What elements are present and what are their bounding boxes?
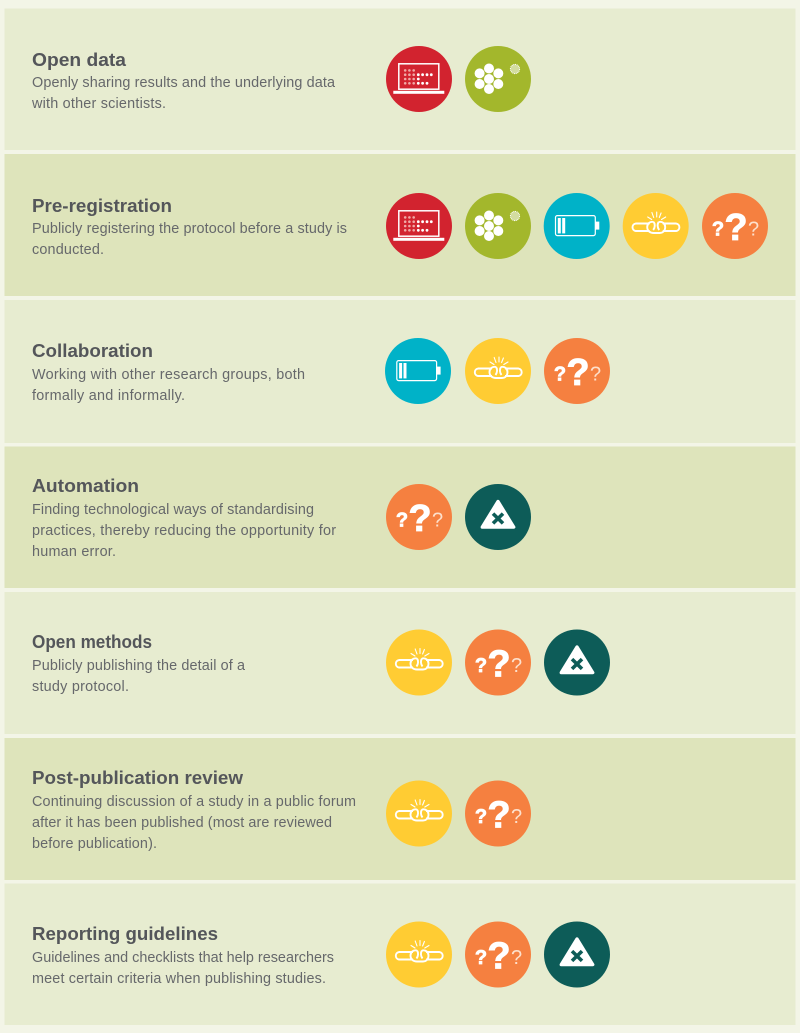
panel: collaboration: [4, 300, 796, 443]
description: collaboration: Working with other research groups, both: [32, 367, 305, 383]
icon: question marks: ?: [712, 219, 724, 241]
description: pre-registration: [32, 221, 347, 258]
icon: question marks: ?: [475, 655, 487, 677]
icon: broken chain: [386, 922, 452, 988]
description: pre-registration: conducted.: [32, 242, 104, 258]
heading: automation: Automation: [32, 475, 139, 496]
icon: question marks: ?: [475, 947, 487, 969]
heading: pre-registration: Pre-registration: [32, 195, 172, 216]
icon: question marks: ?: [487, 936, 511, 978]
heading: collaboration: Collaboration: [32, 340, 153, 361]
icon: question marks: ?: [432, 510, 443, 532]
panel: open data: [4, 8, 796, 150]
description: reporting guidelines: meet certain criteria when publishing studies.: [32, 971, 326, 987]
description: open methods: study protocol.: [32, 679, 129, 695]
icon: question marks: [544, 338, 610, 404]
icon: question marks: ?: [487, 794, 511, 836]
icon: question marks: [465, 780, 531, 846]
heading: open methods: Open methods: [32, 631, 152, 652]
description: open data: with other scientists.: [31, 96, 166, 112]
icon: warning triangle: [465, 484, 531, 550]
panel: open methods: [4, 592, 796, 734]
icon: question marks: [465, 922, 531, 988]
icon: question marks: [465, 630, 531, 696]
description: automation: Finding technological ways of standardising: [32, 502, 314, 518]
icon: question marks: ?: [511, 947, 522, 969]
description: automation: practices, thereby reducing the opportunity for: [32, 523, 336, 539]
icon: laptop data: [386, 46, 452, 112]
panel: automation: [4, 446, 796, 588]
description: post-publication review: [32, 794, 356, 852]
description: automation: [32, 502, 336, 560]
panel: reporting guidelines: [4, 884, 796, 1025]
icon: question marks: ?: [511, 655, 522, 677]
icon: flower cells: [465, 193, 531, 259]
icon: low battery: [544, 193, 610, 259]
description: open methods: Publicly publishing the detail of a: [32, 658, 245, 674]
panel: pre-registration: [4, 154, 796, 296]
icon: question marks: ?: [724, 207, 748, 249]
heading: post-publication review: Post-publication review: [32, 767, 244, 788]
icon: flower cells: [465, 46, 531, 112]
description: reporting guidelines: [32, 950, 334, 987]
description: post-publication review: Continuing discussion of a study in a public forum: [32, 794, 356, 810]
icon: question marks: ?: [554, 364, 566, 386]
icon: question marks: ?: [408, 498, 432, 540]
icon: broken chain: [386, 630, 452, 696]
icon: warning triangle: [544, 922, 610, 988]
icon: question marks: [702, 193, 768, 259]
icon: question marks: ?: [475, 806, 487, 828]
icon: warning triangle: [544, 630, 610, 696]
description: collaboration: [32, 367, 305, 404]
description: post-publication review: after it has been published (most are reviewed: [32, 815, 332, 831]
icon: question marks: ?: [487, 644, 511, 686]
icon: question marks: ?: [566, 352, 590, 394]
icon: question marks: [386, 484, 452, 550]
heading: open data: Open data: [32, 49, 127, 70]
description: reporting guidelines: Guidelines and checklists that help researchers: [32, 950, 334, 966]
description: open data: [31, 75, 335, 112]
icon: laptop data: [386, 193, 452, 259]
icon: question marks: ?: [396, 510, 408, 532]
description: post-publication review: before publication).: [32, 836, 157, 852]
icon: question marks: ?: [590, 364, 601, 386]
icon: broken chain: [623, 193, 689, 259]
description: open methods: [32, 658, 245, 695]
description: automation: human error.: [32, 544, 116, 560]
heading: reporting guidelines: Reporting guidelines: [32, 923, 218, 944]
icon: question marks: ?: [511, 806, 522, 828]
description: pre-registration: Publicly registering the protocol before a study is: [32, 221, 347, 237]
icon: low battery: [385, 338, 451, 404]
icon: question marks: ?: [748, 219, 759, 241]
description: collaboration: formally and informally.: [32, 388, 185, 404]
icon: broken chain: [465, 338, 531, 404]
icon: broken chain: [386, 780, 452, 846]
panel: post-publication review: [4, 738, 796, 880]
description: open data: Openly sharing results and the underlying data: [32, 75, 335, 91]
